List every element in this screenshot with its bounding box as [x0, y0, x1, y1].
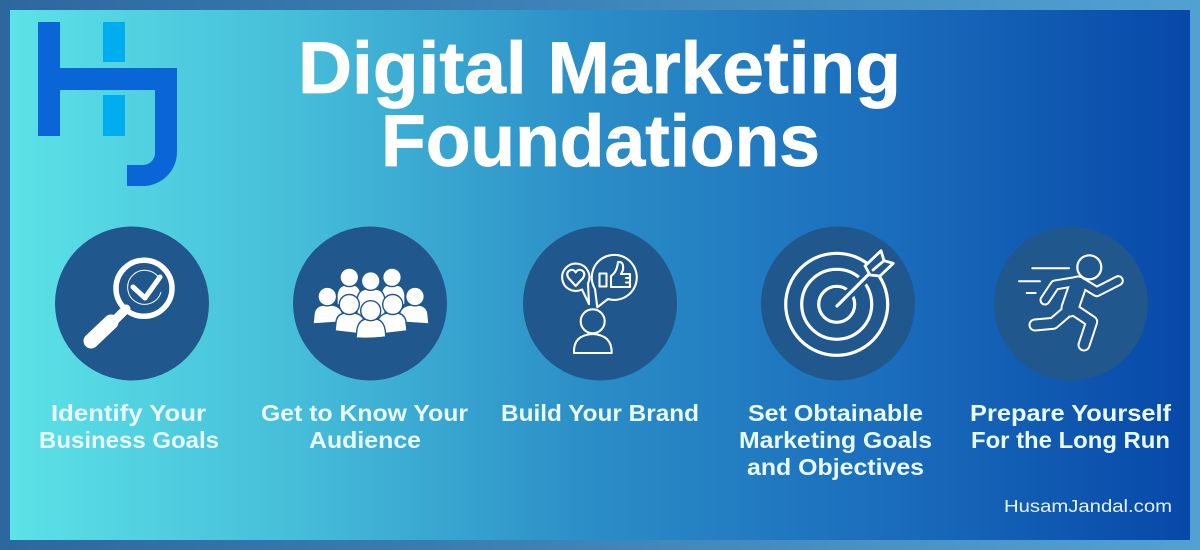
label 4 — [739, 400, 932, 480]
circle badge 4 — [761, 226, 915, 380]
circle badge 3 — [523, 226, 677, 380]
label 5 — [970, 400, 1171, 453]
step 4: set obtainable marketing goals and objectives — [739, 226, 932, 480]
footer website credit: HusamJandal.com — [1004, 496, 1172, 516]
label 2 — [261, 400, 468, 453]
label 1: Identify Your — [51, 400, 206, 426]
label 5: For the Long Run — [971, 427, 1170, 453]
step 1: identify your business goals — [39, 226, 219, 453]
title — [298, 28, 901, 182]
circle badge 2 — [293, 226, 447, 380]
label 3: Build Your Brand — [501, 400, 699, 426]
step 3: build your brand — [501, 226, 699, 426]
circle badge 1 — [55, 226, 209, 380]
logo: HJ monogram — [38, 22, 177, 186]
label 2: Audience — [309, 427, 421, 453]
icon: magnifying glass with check — [91, 260, 172, 341]
step 5: prepare yourself for the long run — [970, 226, 1171, 453]
icon: person with like and heart speech bubbles — [562, 255, 637, 353]
step 2: get to know your audience — [261, 226, 468, 453]
circle badge 5 — [994, 226, 1148, 380]
label 4: and Objectives — [747, 454, 924, 480]
icon: target with arrow — [786, 251, 893, 355]
title: Digital Marketing — [298, 28, 901, 109]
label 1 — [39, 400, 219, 453]
icon: running person — [1019, 255, 1118, 345]
label 1: Business Goals — [39, 427, 219, 453]
label 4: Marketing Goals — [739, 427, 932, 453]
icon: group of people — [313, 268, 429, 338]
label 5: Prepare Yourself — [970, 400, 1171, 426]
title: Foundations — [381, 101, 820, 182]
label 4: Set Obtainable — [748, 400, 923, 426]
label 2: Get to Know Your — [261, 400, 468, 426]
